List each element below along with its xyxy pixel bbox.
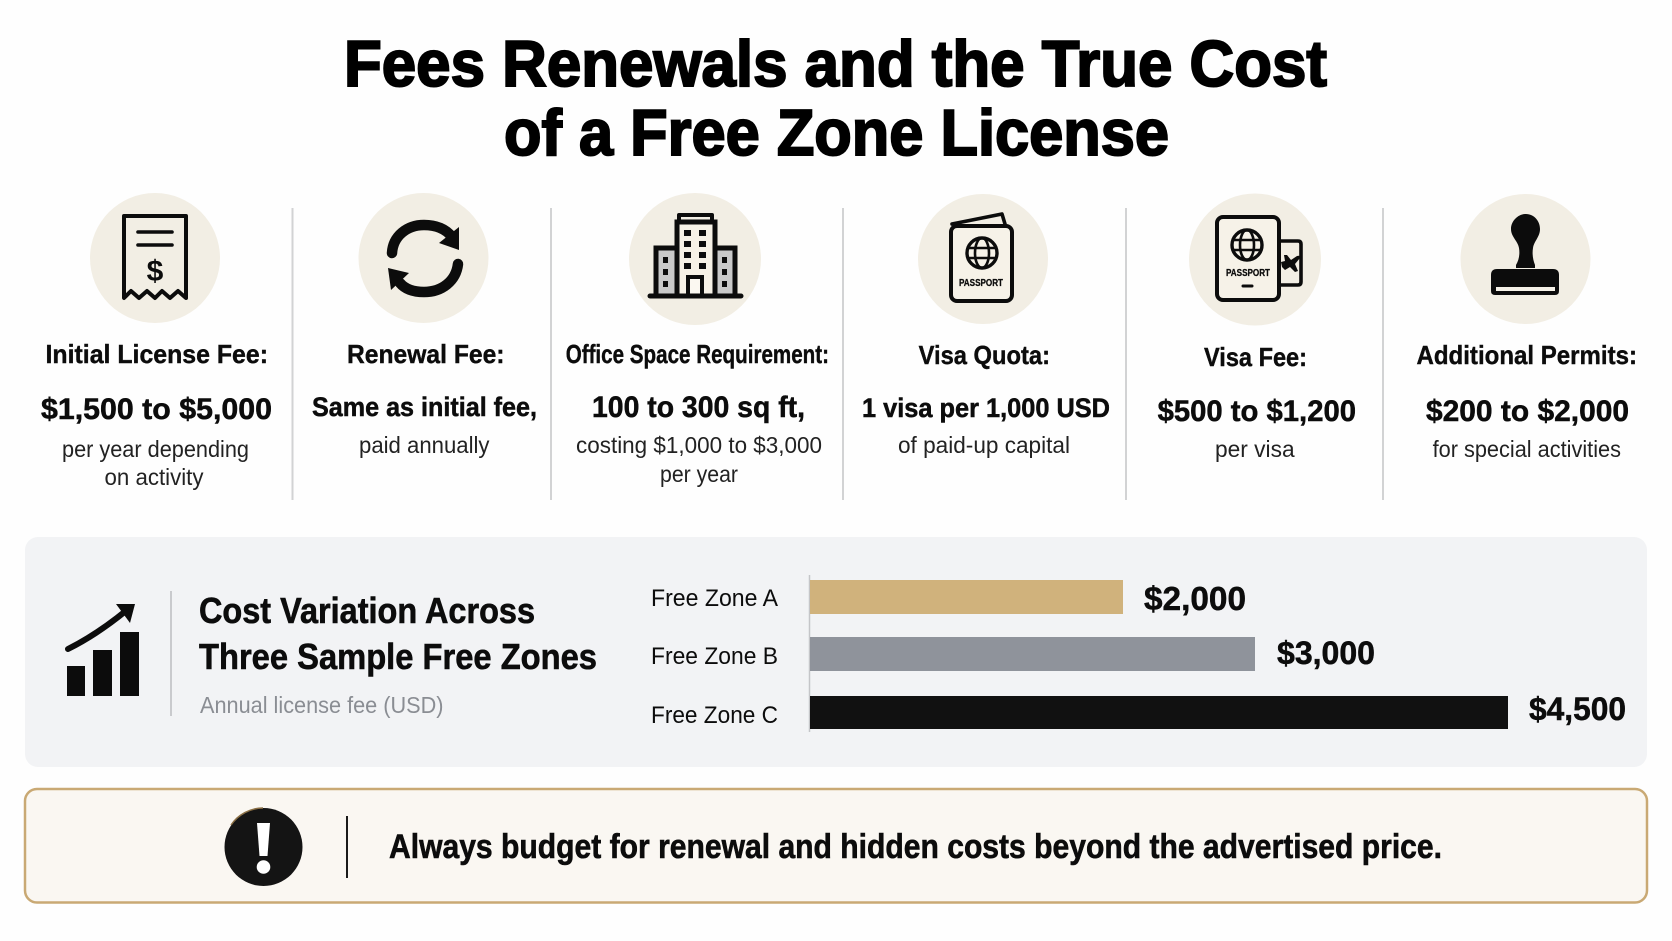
description <box>62 436 249 490</box>
chart heading: Cost Variation Across <box>199 590 535 631</box>
value: $1,500 to $5,000 <box>41 393 272 426</box>
icon: renewal arrows <box>358 193 488 323</box>
chart subtitle: Annual license fee (USD) <box>200 692 444 718</box>
description: per visa <box>1215 436 1295 462</box>
title: Fees Renewals and the True Cost <box>344 27 1327 100</box>
heading: Visa Fee: <box>1204 342 1307 372</box>
description: paid annually <box>359 432 490 458</box>
icon: receipt <box>90 193 220 323</box>
bar: free zone A: Free Zone A <box>651 585 778 612</box>
heading: Visa Quota: <box>919 340 1050 370</box>
panel: cost variation <box>25 537 1647 767</box>
panel: visa fee <box>1158 194 1356 462</box>
panel: additional permits <box>1416 194 1637 462</box>
chart heading: Three Sample Free Zones <box>199 636 597 677</box>
description: of paid-up capital <box>898 432 1070 458</box>
description: per year <box>660 461 738 487</box>
description: on activity <box>104 464 204 490</box>
panel: visa quota <box>862 194 1110 458</box>
bar: free zone A <box>651 580 1246 617</box>
heading: Additional Permits: <box>1416 340 1637 370</box>
icon: office building <box>629 193 761 325</box>
heading: Office Space Requirement: <box>566 339 829 369</box>
heading: Initial License Fee: <box>46 339 268 369</box>
icon: passport with visa card: PASSPORT <box>1226 267 1270 279</box>
value: $200 to $2,000 <box>1426 395 1629 428</box>
bar: free zone A: $2,000 <box>1144 580 1246 617</box>
bar: free zone C: $4,500 <box>1529 691 1626 727</box>
panel: office space requirement <box>566 193 829 487</box>
icon: passport <box>918 194 1048 324</box>
description: costing $1,000 to $3,000 <box>576 432 822 458</box>
bar: free zone B: $3,000 <box>1277 635 1375 671</box>
title: of a Free Zone License <box>504 96 1169 169</box>
panel: initial license fee <box>41 193 272 490</box>
title <box>344 27 1327 169</box>
description <box>576 432 822 487</box>
chart heading <box>199 590 597 677</box>
icon: passport with visa card <box>1189 194 1321 326</box>
description: for special activities <box>1433 436 1621 462</box>
heading: Renewal Fee: <box>347 339 504 369</box>
bar: free zone C <box>651 691 1626 729</box>
description: per year depending <box>62 436 249 462</box>
bar: free zone C: Free Zone C <box>651 702 778 729</box>
icon: stamp <box>1460 194 1590 324</box>
value: Same as initial fee, <box>312 392 537 422</box>
value: 100 to 300 sq ft, <box>592 391 805 424</box>
callout <box>25 789 1647 902</box>
bar chart <box>651 575 1626 732</box>
icon: passport: PASSPORT <box>959 277 1003 289</box>
bar: free zone B <box>651 635 1375 671</box>
value: 1 visa per 1,000 USD <box>862 393 1110 423</box>
panel: renewal fee <box>312 193 537 458</box>
icon: receipt: $ <box>147 255 164 288</box>
icon: exclamation <box>224 808 302 886</box>
callout text: Always budget for renewal and hidden costs beyond the advertised price. <box>389 828 1442 866</box>
icon: rising bar chart <box>67 604 139 696</box>
value: $500 to $1,200 <box>1158 395 1356 428</box>
bar: free zone B: Free Zone B <box>651 643 778 670</box>
